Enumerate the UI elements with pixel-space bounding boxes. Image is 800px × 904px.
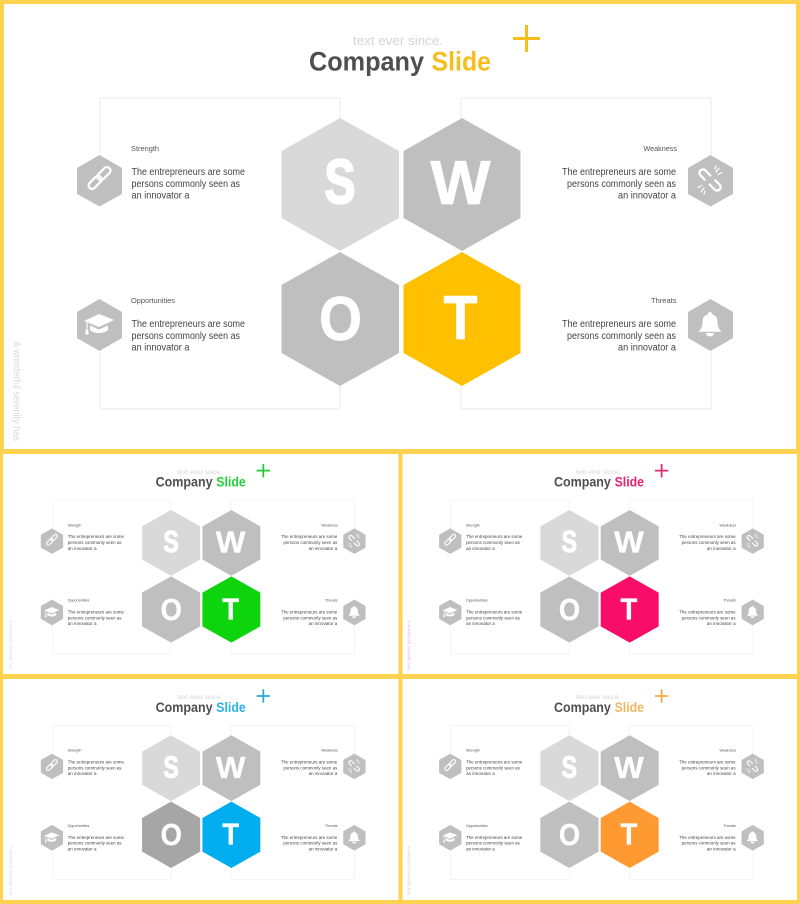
title: Company (554, 474, 611, 489)
panel: blue SWOT slide (7, 689, 366, 896)
block: opportunities (77, 296, 245, 354)
panel: orange SWOT slide (406, 689, 764, 896)
block: opportunities: persons commonly seen as (68, 615, 122, 621)
block: weakness (562, 144, 733, 206)
hexagon W: W (614, 525, 644, 560)
block: strength: persons commonly seen as (68, 765, 122, 771)
block: strength (439, 749, 522, 779)
title: Company (309, 46, 424, 76)
block: strength: The entrepreneurs are some (466, 534, 522, 540)
hexagon O (540, 576, 599, 643)
hexagon T (202, 802, 260, 868)
block: weakness: Weakness (720, 523, 736, 527)
block: weakness: The entrepreneurs are some (679, 534, 736, 540)
subtitle: text ever since. (353, 33, 443, 48)
icon: plus (655, 689, 668, 703)
subtitle: text ever since. (177, 694, 222, 701)
hexagon S: S (324, 148, 356, 217)
block: threats: an innovator a (707, 621, 736, 627)
block: threats: persons commonly seen as (283, 615, 338, 621)
hexagon S: S (163, 524, 179, 559)
block: weakness: persons commonly seen as (283, 765, 338, 771)
block: strength: an innovator a (68, 546, 97, 552)
block: threats: Threats (325, 824, 338, 828)
block: threats: The entrepreneurs are some (281, 835, 338, 841)
block: strength: an innovator a (68, 771, 97, 777)
panel: main yellow SWOT slide (10, 25, 733, 441)
block: weakness: The entrepreneurs are some (281, 534, 338, 540)
block: opportunities (439, 824, 522, 852)
block: strength: Strength (466, 749, 480, 753)
panel: green SWOT slide (7, 464, 366, 670)
block: weakness: Weakness (321, 749, 338, 753)
block: weakness (679, 523, 764, 554)
block: strength: The entrepreneurs are some (132, 167, 245, 178)
block: threats: persons commonly seen as (682, 615, 736, 621)
block: weakness: an innovator a (309, 546, 338, 552)
block: weakness: Weakness (720, 749, 736, 753)
block: opportunities: Opportunities (466, 824, 488, 828)
block: threats: The entrepreneurs are some (281, 609, 338, 615)
subtitle: text ever since. (576, 469, 620, 476)
block: opportunities: The entrepreneurs are some (132, 319, 245, 330)
block: strength: Strength (68, 523, 81, 527)
block: strength: Strength (131, 144, 159, 153)
title (309, 46, 491, 76)
block: opportunities: an innovator a (68, 621, 97, 627)
vertical caption: A wonderful serenity has (7, 846, 13, 896)
block: weakness: persons commonly seen as (283, 540, 338, 546)
block: weakness: an innovator a (707, 546, 736, 552)
hexagon W (601, 510, 659, 576)
icon: plus (513, 25, 540, 52)
title (554, 474, 644, 489)
block: threats (679, 824, 764, 852)
hexagon T: T (621, 591, 638, 626)
vertical caption: A wonderful serenity has (406, 846, 412, 896)
block: strength: The entrepreneurs are some (466, 760, 522, 766)
block: threats (562, 296, 733, 354)
title: Slide (615, 474, 644, 489)
subtitle: text ever since. (177, 469, 222, 476)
hexagon T: T (222, 591, 239, 626)
title: Slide (615, 700, 644, 715)
block: strength: The entrepreneurs are some (68, 760, 124, 766)
title: Company (156, 474, 213, 489)
block: weakness: persons commonly seen as (682, 765, 736, 771)
panel: pink SWOT slide (406, 464, 764, 670)
block: opportunities: Opportunities (131, 296, 175, 305)
block: opportunities: an innovator a (132, 342, 190, 354)
icon: plus (257, 689, 270, 703)
block: threats: an innovator a (618, 342, 676, 354)
block: threats: persons commonly seen as (567, 331, 676, 342)
block: strength: The entrepreneurs are some (68, 534, 124, 540)
hexagon S: S (562, 749, 577, 784)
block: opportunities: The entrepreneurs are some (68, 609, 124, 615)
block: threats (281, 599, 366, 627)
block: opportunities: persons commonly seen as (466, 841, 520, 847)
hexagon S (540, 510, 599, 576)
vertical caption: A wonderful serenity has (406, 620, 412, 670)
block: threats: an innovator a (309, 846, 338, 852)
block: weakness: an innovator a (707, 771, 736, 777)
hexagon O (142, 802, 200, 868)
title: Company (554, 700, 611, 715)
block: strength (439, 523, 522, 554)
hexagon T: T (444, 284, 478, 353)
connector lines (450, 725, 753, 879)
block: strength (77, 144, 245, 206)
hexagon W (404, 118, 520, 251)
hexagon S: S (163, 749, 179, 784)
block: weakness (679, 749, 764, 779)
hexagon W (601, 735, 659, 801)
block: threats: Threats (325, 599, 338, 603)
block: strength: persons commonly seen as (466, 765, 520, 771)
block: opportunities: an innovator a (68, 846, 97, 852)
block: threats: The entrepreneurs are some (562, 319, 676, 330)
block: weakness: Weakness (644, 144, 677, 153)
hexagon O: O (161, 817, 182, 852)
connector lines (100, 98, 711, 409)
hexagon O (142, 576, 200, 643)
hexagon O (282, 252, 399, 386)
block: strength (41, 749, 124, 779)
hexagon W: W (216, 525, 246, 560)
hexagon S (282, 118, 399, 251)
block: opportunities (439, 599, 522, 627)
vertical caption: A wonderful serenity has (10, 341, 22, 441)
block: opportunities: The entrepreneurs are some (68, 835, 124, 841)
hexagon W: W (430, 149, 491, 218)
hexagon O: O (161, 592, 182, 627)
block: weakness: persons commonly seen as (567, 179, 676, 190)
connector lines (52, 500, 355, 654)
hexagon W: W (614, 750, 644, 785)
block: threats (679, 599, 764, 627)
block: threats: The entrepreneurs are some (679, 609, 736, 615)
block: opportunities: persons commonly seen as (466, 615, 520, 621)
hexagon O: O (559, 817, 580, 852)
hexagon W: W (216, 750, 246, 785)
block: opportunities: an innovator a (466, 846, 495, 852)
block: strength: persons commonly seen as (466, 540, 520, 546)
hexagon T: T (621, 817, 638, 852)
block: weakness: The entrepreneurs are some (562, 167, 676, 178)
block: threats (281, 824, 366, 852)
icon: plus (257, 464, 270, 477)
block: threats: Threats (723, 599, 736, 603)
vertical caption: A wonderful serenity has (7, 620, 13, 670)
title: Slide (216, 474, 246, 489)
block: strength (41, 523, 124, 554)
block: weakness: The entrepreneurs are some (679, 760, 736, 766)
title: Company (156, 700, 213, 715)
hexagon O: O (559, 592, 580, 627)
block: strength: an innovator a (466, 771, 495, 777)
block: strength: Strength (68, 749, 81, 753)
block: threats: an innovator a (309, 621, 338, 627)
block: strength: persons commonly seen as (132, 179, 240, 190)
block: weakness: Weakness (321, 523, 338, 527)
block: opportunities: Opportunities (68, 824, 89, 828)
block: strength: an innovator a (466, 546, 495, 552)
block: strength: an innovator a (132, 190, 190, 202)
hexagon T (404, 252, 520, 386)
hexagon T (202, 576, 260, 643)
connector lines (450, 500, 753, 654)
hexagon O (540, 802, 599, 868)
hexagon T (601, 802, 659, 868)
hexagon S (142, 510, 200, 576)
title (156, 700, 246, 715)
block: threats: persons commonly seen as (682, 841, 736, 847)
block: opportunities (41, 599, 124, 627)
block: opportunities: persons commonly seen as (132, 331, 240, 342)
block: weakness (281, 523, 366, 554)
block: strength: Strength (466, 523, 480, 527)
block: threats: The entrepreneurs are some (679, 835, 736, 841)
subtitle: text ever since. (576, 694, 620, 701)
block: threats: Threats (723, 824, 736, 828)
block: opportunities: The entrepreneurs are some (466, 609, 522, 615)
block: weakness: an innovator a (618, 190, 676, 202)
hexagon W (202, 735, 260, 801)
block: weakness: persons commonly seen as (682, 540, 736, 546)
hexagon O: O (319, 285, 362, 354)
hexagon S (540, 735, 599, 801)
hexagon T (601, 576, 659, 643)
connector lines (52, 725, 355, 879)
hexagon T: T (222, 817, 239, 852)
block: threats: an innovator a (707, 846, 736, 852)
hexagon S (142, 735, 200, 801)
block: opportunities: an innovator a (466, 621, 495, 627)
block: opportunities: persons commonly seen as (68, 841, 122, 847)
title: Slide (432, 46, 491, 76)
block: weakness (281, 749, 366, 779)
block: weakness: an innovator a (309, 771, 338, 777)
block: threats: Threats (651, 296, 677, 305)
block: threats: persons commonly seen as (283, 841, 338, 847)
block: strength: persons commonly seen as (68, 540, 122, 546)
block: opportunities: Opportunities (466, 599, 488, 603)
title (156, 474, 246, 489)
title: Slide (216, 700, 246, 715)
hexagon S: S (562, 524, 577, 559)
block: weakness: The entrepreneurs are some (281, 760, 338, 766)
block: opportunities: The entrepreneurs are some (466, 835, 522, 841)
hexagon W (202, 510, 260, 576)
block: opportunities (41, 824, 124, 852)
icon: plus (655, 464, 668, 477)
block: opportunities: Opportunities (68, 599, 89, 603)
title (554, 700, 644, 715)
